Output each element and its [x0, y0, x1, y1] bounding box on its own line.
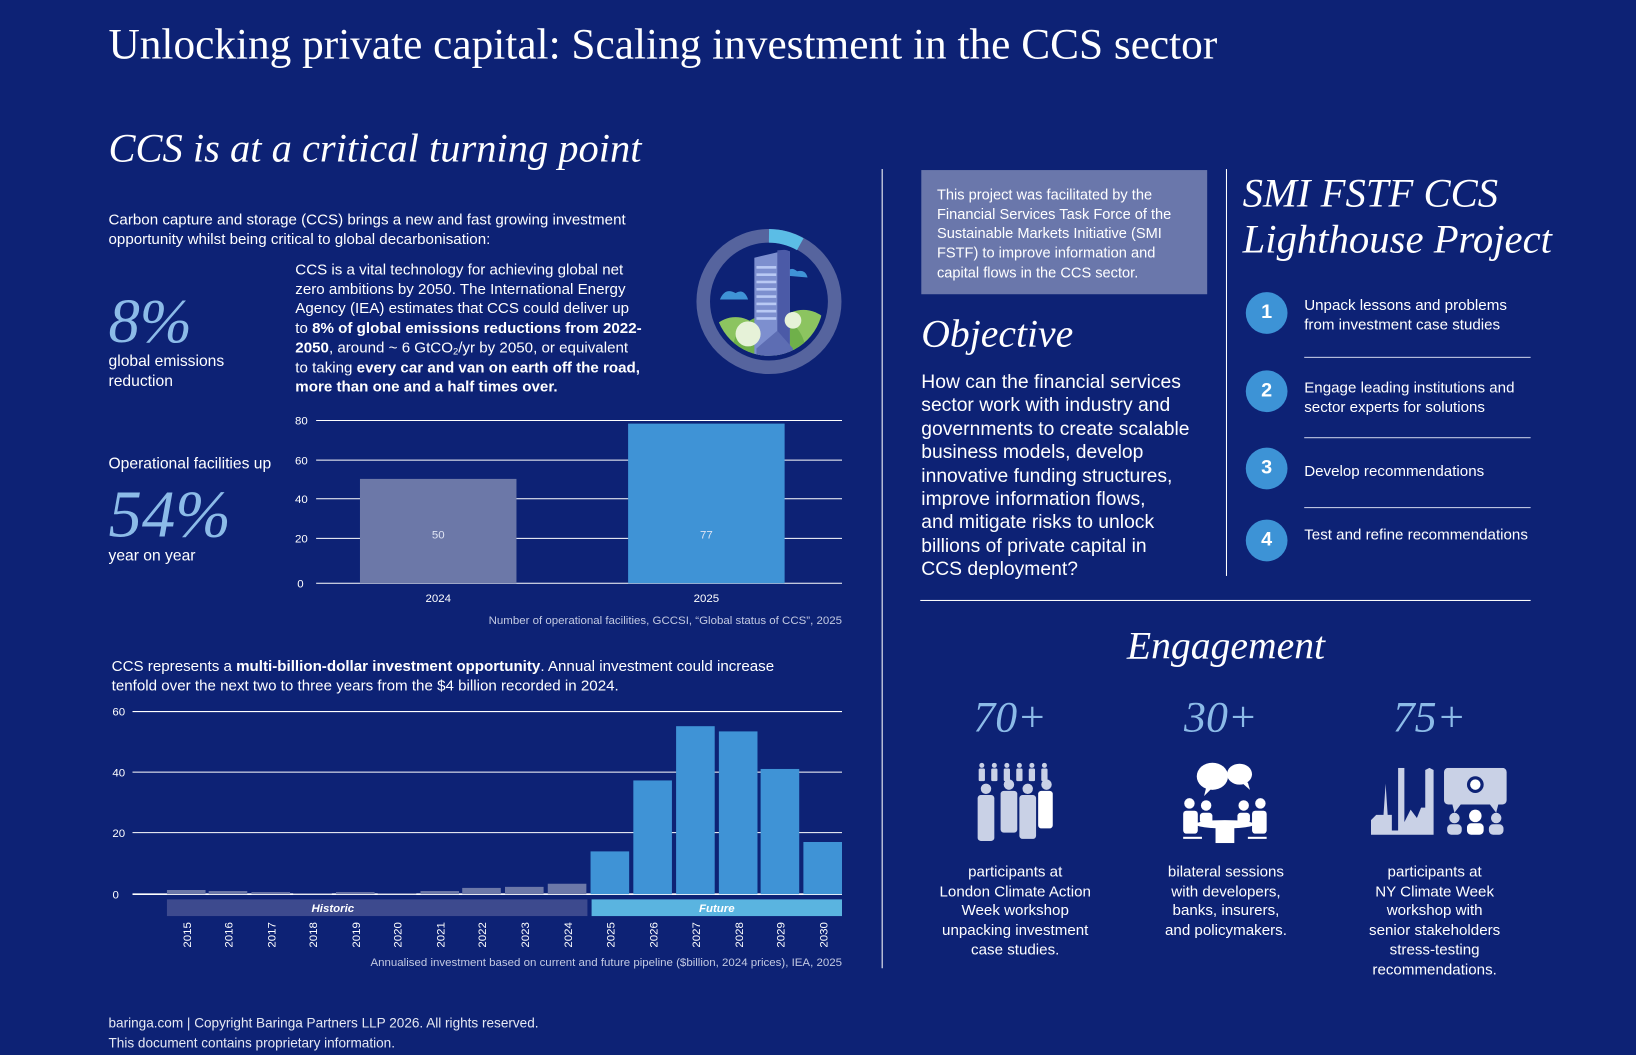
bar chart: annual investment	[112, 707, 842, 948]
step 3: Develop recommendations	[1304, 463, 1484, 480]
stat: 70+: 70+	[973, 694, 1047, 742]
title: Unlocking private capital: Scaling investment in the CCS sector	[109, 20, 1217, 68]
info box	[921, 170, 1207, 294]
objective text: How can the financial services	[921, 370, 1181, 392]
stat: 30+	[1183, 694, 1267, 844]
step 3	[1246, 448, 1484, 490]
objective text: governments to create scalable	[921, 417, 1190, 439]
text: 70+: participants at	[968, 864, 1062, 881]
bar chart: annual investment: Historic	[311, 903, 355, 915]
step 1: Unpack lessons and problems from investment case studies	[1304, 297, 1507, 334]
bar chart: annual investment: 2026	[648, 922, 660, 948]
text: 75+: senior stakeholders	[1369, 922, 1500, 939]
step 3: 3	[1261, 457, 1272, 479]
bar chart: operational facilities: 60	[295, 455, 308, 467]
heading: turning point: CCS is at a critical turning point	[109, 126, 642, 171]
heading: objective: Objective	[921, 312, 1073, 356]
heading: lighthouse project: Lighthouse Project	[1243, 217, 1552, 262]
text: 30+: with developers,	[1171, 883, 1281, 900]
step 4: Test and refine recommendations	[1304, 527, 1528, 544]
caption: investment: Annualised investment based on current and future pipeline ($billion, 2024 prices), IEA, 2025	[370, 957, 842, 969]
bar chart: annual investment: 60	[112, 707, 125, 719]
text: 30+	[1165, 864, 1287, 939]
bar chart: operational facilities: 2024	[425, 593, 452, 605]
text block: IEA: more than one and a half times over.	[295, 379, 558, 396]
heading: lighthouse project: SMI FSTF CCS	[1243, 171, 1498, 216]
text: 30+: and policymakers.	[1165, 922, 1287, 939]
info box: This project was facilitated by the Financial Services Task Force of the Sustainable Markets Initiative (SMI FSTF) to improve information and capital flows in the CCS sector.	[937, 186, 1171, 280]
text: 75+: recommendations.	[1372, 961, 1497, 978]
bar chart: annual investment: 2020	[393, 922, 405, 948]
caption: facilities: Number of operational facilities, GCCSI, “Global status of CCS”, 2025	[489, 615, 842, 627]
bar chart: annual investment: 2025	[606, 922, 618, 948]
text: 75+: stress-testing	[1390, 942, 1480, 959]
text block: IEA: 2050, around ~ 6 GtCO2/yr by 2050, or equivalent	[295, 340, 628, 357]
footer: This document contains proprietary information.	[109, 1035, 395, 1051]
stat: 8%	[109, 287, 224, 390]
bar chart: annual investment: 2028	[734, 922, 746, 948]
bar chart: annual investment: 2029	[776, 922, 788, 948]
text block: IEA: Agency (IEA) estimates that CCS could deliver up	[295, 301, 629, 318]
text: 70+	[940, 864, 1091, 959]
objective text: CCS deployment?	[921, 557, 1078, 579]
text: investment opportunity: CCS represents a multi-billion-dollar investment opportunity. Annual investment could increase tenfold over the next two to three years from the $4 billion recorded in 2024.	[112, 658, 774, 695]
text block: IEA: zero ambitions by 2050. The International Energy	[295, 281, 626, 298]
bar chart: annual investment: 0	[113, 889, 119, 901]
stat: 70+	[973, 694, 1053, 841]
step 1	[1246, 292, 1507, 334]
bar chart: annual investment: 2030	[818, 922, 830, 948]
bar chart: annual investment: Future	[699, 903, 735, 915]
bar chart: operational facilities: 20	[295, 534, 308, 546]
bar chart: annual investment: 20	[112, 828, 125, 840]
objective text: billions of private capital in	[921, 534, 1147, 556]
stat: 54%: year on year	[109, 547, 196, 564]
step 4	[1246, 520, 1528, 562]
label: operational facilities: Operational facilities up	[109, 455, 271, 473]
objective text: improve information flows,	[921, 487, 1146, 509]
bar chart: annual investment: 2023	[520, 922, 532, 948]
text: 75+: participants at	[1388, 864, 1482, 881]
text: 70+: Week workshop	[962, 903, 1069, 920]
text: 30+: bilateral sessions	[1168, 864, 1284, 881]
stat: 8%: 8%	[109, 287, 192, 356]
step 2	[1246, 370, 1515, 416]
text block: IEA: to 8% of global emissions reductions from 2022-	[295, 320, 642, 337]
bar chart: operational facilities: 2025	[694, 593, 719, 605]
step 2: Engage leading institutions and sector experts for solutions	[1304, 380, 1515, 416]
bar chart: annual investment: 2027	[691, 922, 703, 948]
stat: 54%: 54%	[109, 477, 231, 551]
bar chart: annual investment: 2024	[563, 921, 575, 948]
text: 75+: NY Climate Week	[1375, 883, 1494, 900]
icon: meeting	[1183, 762, 1267, 844]
icon: crowd	[978, 762, 1053, 841]
icon: city circle	[696, 229, 842, 374]
objective text	[921, 370, 1190, 579]
intro text: Carbon capture and storage (CCS) brings a new and fast growing investment opportunity whilst being critical to global decarbonisation:	[109, 212, 626, 248]
objective text: and mitigate risks to unlock	[921, 511, 1154, 533]
step 2: 2	[1261, 380, 1272, 402]
bar chart: operational facilities: 77	[700, 529, 713, 541]
bar chart: annual investment: 40	[112, 767, 125, 779]
bar chart: annual investment: 2015	[182, 922, 194, 948]
bar chart: annual investment: 2019	[351, 922, 363, 948]
bar chart: operational facilities: 80	[295, 416, 308, 428]
stat: 30+: 30+	[1184, 694, 1257, 742]
bar chart: annual investment: 2016	[224, 922, 236, 948]
text: 70+: London Climate Action	[940, 883, 1091, 900]
text block: IEA: CCS is a vital technology for achieving global net	[295, 262, 623, 279]
steps list	[1246, 292, 1531, 562]
bar chart: operational facilities	[295, 416, 842, 605]
stat: 75+	[1371, 694, 1507, 835]
stat: 8%: reduction	[109, 372, 173, 390]
stat: 8%: global emissions	[109, 353, 224, 370]
icon: city and ideas	[1371, 768, 1507, 835]
text: 70+: case studies.	[971, 942, 1059, 959]
objective text: sector work with industry and	[921, 394, 1170, 416]
step 1: 1	[1261, 302, 1272, 323]
footer	[108, 1015, 539, 1051]
bar chart: operational facilities: 50	[432, 529, 445, 541]
stat: 75+: 75+	[1393, 694, 1466, 742]
objective text: innovative funding structures,	[921, 464, 1172, 486]
text block: IEA	[295, 262, 642, 396]
bar chart: annual investment: 2021	[435, 922, 447, 948]
bar chart: annual investment: 2018	[308, 922, 320, 948]
step 4: 4	[1261, 529, 1272, 551]
text: 70+: unpacking investment	[942, 922, 1088, 939]
bar chart: annual investment: 2022	[477, 922, 489, 948]
text: 30+: banks, insurers,	[1173, 903, 1279, 920]
objective text: business models, develop	[921, 441, 1143, 462]
bar chart: operational facilities: 40	[295, 494, 308, 506]
text block: IEA: to taking every car and van on earth off the road,	[295, 359, 640, 376]
heading: engagement: Engagement	[1127, 624, 1325, 668]
bar chart: annual investment: 2017	[266, 922, 278, 948]
text: 75+: workshop with	[1387, 903, 1483, 920]
footer: baringa.com | Copyright Baringa Partners LLP 2026. All rights reserved.	[109, 1015, 539, 1031]
text: 75+	[1369, 864, 1500, 978]
bar chart: operational facilities: 0	[297, 578, 304, 590]
heading: lighthouse project	[1242, 171, 1553, 262]
